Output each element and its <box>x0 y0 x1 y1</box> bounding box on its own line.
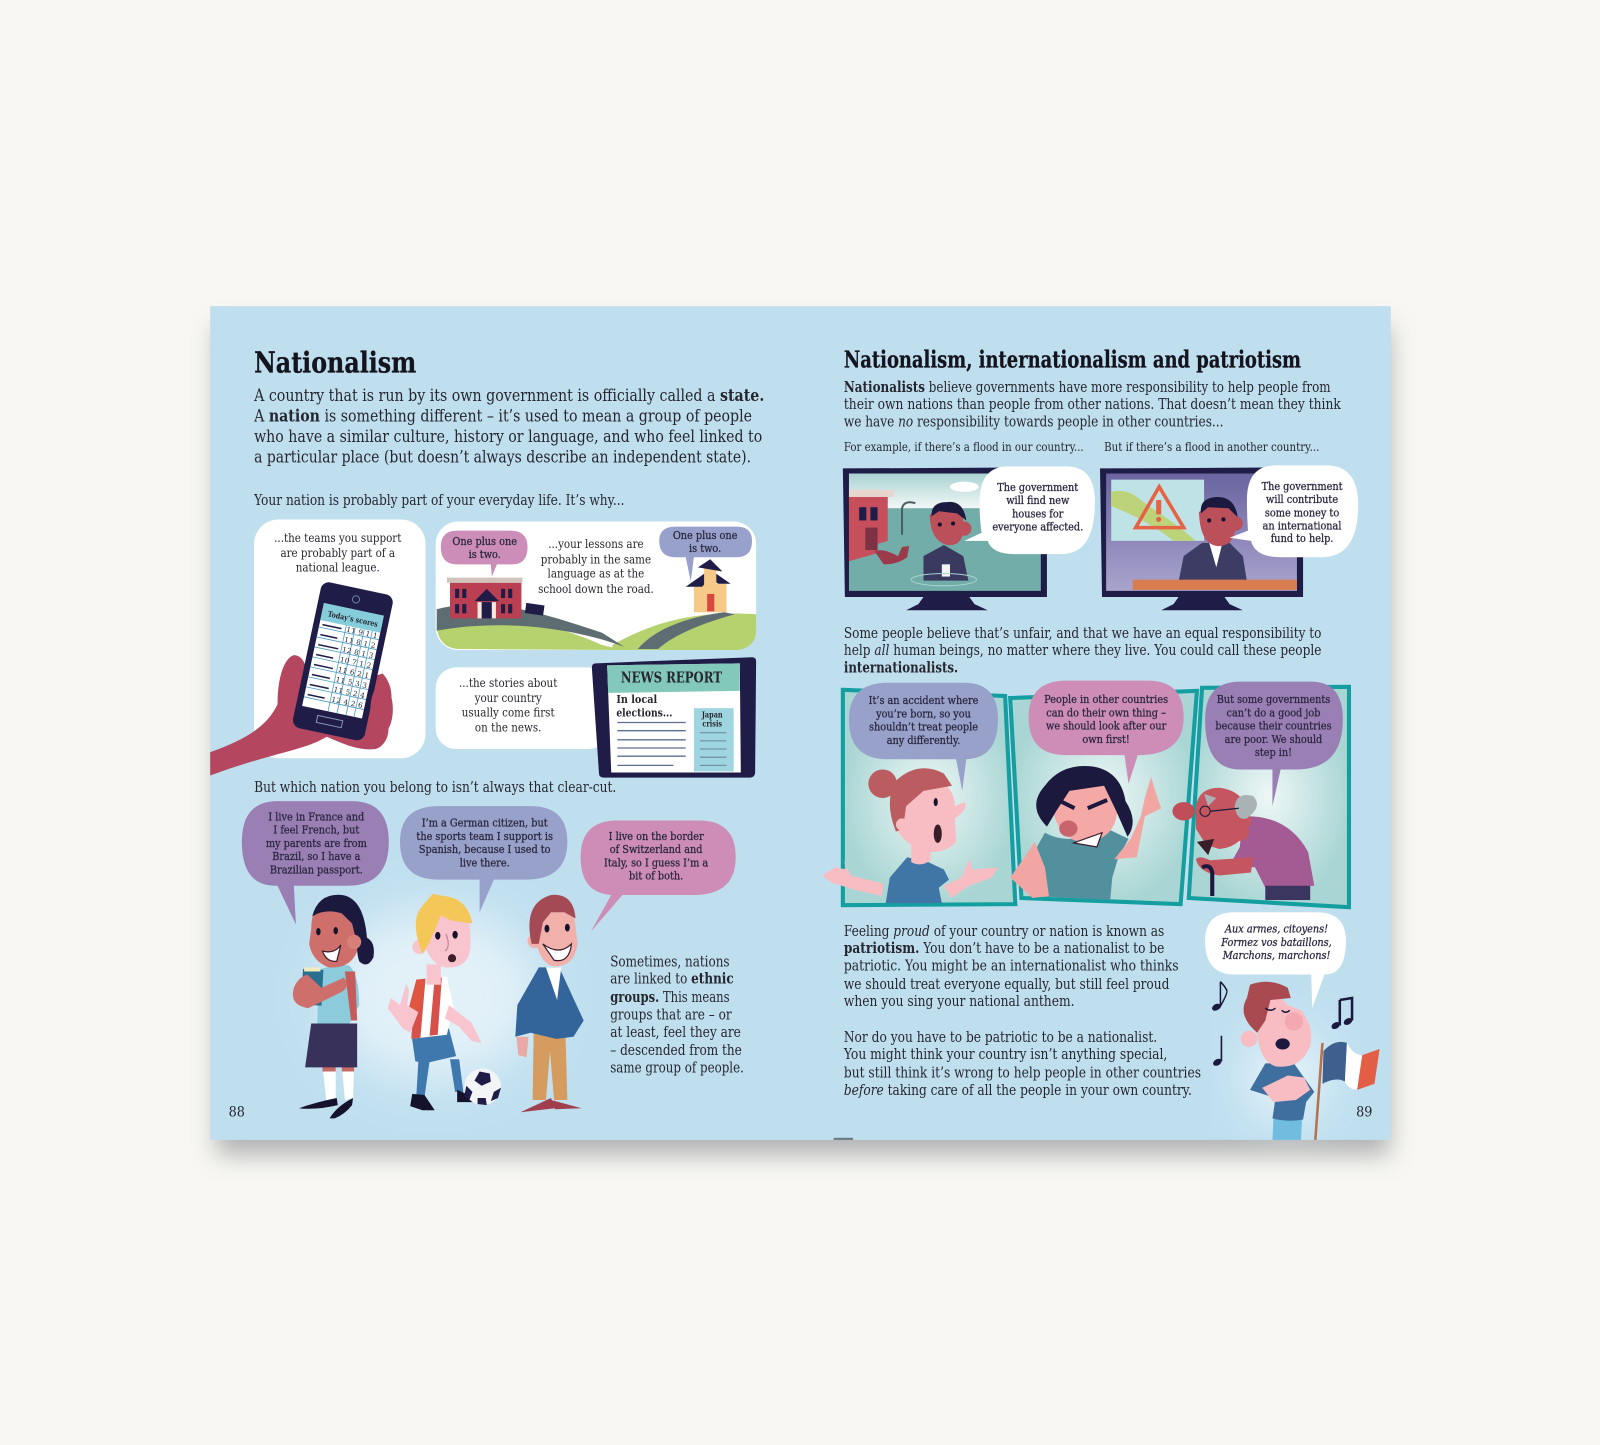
speech bubble: anthem lyrics: Marchons, marchons! <box>1222 950 1330 962</box>
panel: news stories <box>436 657 756 778</box>
text: ethnic groups: groups. This means <box>610 989 730 1006</box>
intro paragraph: A country that is run by its own government is officially called a state. <box>253 385 764 405</box>
internationalists paragraph: internationalists. <box>844 660 958 677</box>
icon: music note lower left <box>1212 1036 1223 1067</box>
speech bubble: look after our own: we should look after our <box>1046 720 1166 733</box>
speech bubble: international fund: an international <box>1263 520 1341 533</box>
text: ethnic groups: – descended from the <box>610 1042 742 1059</box>
duck <box>874 546 909 564</box>
speech bubble: governments poor: But some governments <box>1217 694 1330 706</box>
hills and road <box>437 604 756 650</box>
nationalist paragraph: You might think your country isn’t anything special, <box>843 1046 1167 1063</box>
speech bubble: governments poor: step in! <box>1255 747 1292 759</box>
page number 89: 89 <box>1356 1104 1372 1120</box>
speech bubble: German Spanish: I’m a German citizen, but <box>422 817 548 830</box>
icon: hand holding phone: 11 8 1 2 <box>343 635 376 650</box>
speech bubble: international fund: some money to <box>1265 507 1339 520</box>
speech bubble: French Brazilian: I live in France and <box>268 811 365 824</box>
icon: hand holding phone: Today’s scores <box>327 609 379 629</box>
speech bubble: look after our own: can do their own thing – <box>1046 707 1166 720</box>
speech bubble: pink one plus one: One plus one <box>452 535 517 548</box>
speech bubble: Swiss Italian border: of Switzerland and <box>610 844 703 856</box>
patriotism paragraph: Feeling proud of your country or nation is known as <box>844 923 1164 940</box>
internationalists paragraph <box>844 625 1322 676</box>
character: singing boy <box>1241 982 1380 1140</box>
glow behind characters <box>327 908 541 1082</box>
intro paragraph <box>253 385 764 466</box>
panel text: lessons: ...your lessons are <box>548 537 644 551</box>
TV: flood reporter <box>843 467 1047 610</box>
school building <box>447 578 544 618</box>
panel text: lessons: language as at the <box>548 567 644 581</box>
TV: news anchor <box>1100 467 1303 610</box>
patriotism paragraph: we should treat everyone equally, but still feel proud <box>844 976 1170 993</box>
speech bubble: find new houses: will find new <box>1006 495 1069 507</box>
speech bubble: governments poor: because their countries <box>1215 720 1332 733</box>
icon: hand holding phone: 11 6 2 1 <box>337 665 370 680</box>
icon: hand holding phone: 11 5 2 4 <box>333 685 366 700</box>
speech bubble: Swiss Italian border: bit of both. <box>629 870 683 883</box>
speech bubble: accident of birth: you’re born, so you <box>875 708 971 721</box>
right page title: Nationalism, internationalism and patriotism <box>844 345 1301 373</box>
patriotism paragraph: when you sing your national anthem. <box>844 993 1074 1010</box>
speech bubble: French Brazilian: Brazil, so I have a <box>272 851 360 863</box>
icon: tablet news report: Japan <box>701 710 723 720</box>
caption: flood in another country: But if there’s a flood in another country... <box>1104 440 1319 454</box>
nationalists paragraph: their own nations than people from other nations. That doesn’t mean they think <box>844 396 1342 413</box>
panel text: stories: ...the stories about <box>459 676 558 690</box>
speech bubble: anthem lyrics <box>1205 912 1346 1008</box>
left page title: Nationalism <box>254 346 417 380</box>
icon: tablet news report: NEWS REPORT <box>621 669 722 687</box>
nationalist paragraph: but still think it’s wrong to help people in other countries <box>844 1065 1201 1082</box>
panel: school lessons <box>436 521 756 650</box>
text: ethnic groups <box>610 953 744 1076</box>
speech bubble: look after our own <box>1029 681 1184 784</box>
character: shrugging woman <box>822 768 998 903</box>
page number 88: 88 <box>229 1104 245 1120</box>
speech bubble: German Spanish <box>400 806 567 912</box>
speech bubble: pink one plus one <box>441 531 528 577</box>
panel text: teams: ...the teams you support <box>274 531 402 545</box>
nationalists paragraph: Nationalists believe governments have more responsibility to help people from <box>844 379 1331 396</box>
flag <box>1315 1042 1380 1140</box>
speech bubble: find new houses: The government <box>997 481 1079 494</box>
icon: tablet news report <box>592 657 756 778</box>
comic panel: angry woman <box>1010 681 1197 904</box>
nationalist paragraph: before taking care of all the people in your own country. <box>844 1082 1192 1099</box>
panel text: lessons: school down the road. <box>538 582 654 596</box>
text: ethnic groups: Sometimes, nations <box>610 953 730 970</box>
panel text: lessons: probably in the same <box>541 553 651 567</box>
comic panel: woman shrugging <box>822 683 1015 905</box>
speech bubble: Swiss Italian border: I live on the border <box>609 830 704 843</box>
speech bubble: look after our own: own first! <box>1082 733 1130 746</box>
glow behind singer <box>1245 1031 1327 1122</box>
speech bubble: pink one plus one: is two. <box>469 549 501 561</box>
speech bubble: international fund: fund to help. <box>1271 532 1333 545</box>
text: ethnic groups: same group of people. <box>610 1060 744 1077</box>
character: old man with cane <box>1172 788 1314 900</box>
patriotism paragraph: patriotic. You might be an internationalist who thinks <box>844 957 1179 974</box>
comic panel: old man <box>1172 682 1349 907</box>
character: girl with passport <box>293 895 374 1118</box>
internationalists paragraph: Some people believe that’s unfair, and that we have an equal responsibility to <box>844 625 1322 642</box>
speech bubble: governments poor: are poor. We should <box>1225 733 1323 746</box>
speech bubble: international fund: The government <box>1262 480 1343 493</box>
panel text: teams: are probably part of a <box>280 547 395 560</box>
reporter <box>911 502 977 586</box>
icon: hand holding phone: 12 8 1 3 <box>341 645 374 660</box>
patriotism paragraph: patriotism. You don’t have to be a nationalist to be <box>844 940 1164 957</box>
nationalists paragraph: we have no responsibility towards people in other countries... <box>844 414 1223 431</box>
text: ethnic groups: at least, feel they are <box>610 1024 741 1041</box>
speech bubble: French Brazilian: my parents are from <box>266 838 367 850</box>
internationalists paragraph: help all human beings, no matter where they live. You could call these people <box>844 642 1322 659</box>
icon: tablet news report: crisis <box>702 719 722 729</box>
icon: hand holding phone: 12 4 2 6 <box>331 695 364 710</box>
icon: hand holding phone: 10 7 1 2 <box>339 655 372 670</box>
speech bubble: Swiss Italian border: Italy, so I guess I’m a <box>604 857 708 870</box>
icon: hand holding phone <box>210 581 394 776</box>
text: ethnic groups: are linked to ethnic <box>610 971 734 988</box>
patriotism paragraph <box>844 923 1179 1010</box>
icon: tablet news report: In local <box>616 692 657 706</box>
panel text: stories: your country <box>474 691 542 705</box>
icon: music note upper left <box>1211 982 1227 1012</box>
panel text: teams: national league. <box>296 561 380 575</box>
anchor <box>1133 497 1297 590</box>
map with warning triangle <box>1111 480 1204 541</box>
football <box>464 1068 501 1105</box>
speech bubble: lavender one plus one: One plus one <box>673 529 737 542</box>
icon: double music note <box>1330 998 1353 1031</box>
speech bubble: French Brazilian: Brazilian passport. <box>270 864 363 877</box>
speech bubble: German Spanish: live there. <box>460 857 510 870</box>
speech bubble: find new houses: everyone affected. <box>992 521 1083 534</box>
character: angry woman <box>1010 766 1161 900</box>
flooded building <box>849 490 915 561</box>
speech bubble: Swiss Italian border <box>581 820 736 932</box>
house on hill <box>686 559 731 612</box>
character: boy with football <box>388 894 501 1110</box>
nationalists paragraph <box>844 379 1342 431</box>
text: ethnic groups: groups that are – or <box>610 1006 732 1023</box>
icon: hand holding phone: 11 9 1 1 <box>346 625 378 640</box>
speech bubble: accident of birth: shouldn’t treat people <box>869 721 978 734</box>
speech bubble: lavender one plus one: is two. <box>689 543 721 555</box>
clear-cut lead-in: But which nation you belong to isn’t always that clear-cut. <box>254 779 616 796</box>
speech bubble: accident of birth <box>849 683 998 791</box>
icon: tablet news report: elections... <box>616 705 672 719</box>
speech bubble: German Spanish: the sports team I support is <box>416 830 553 843</box>
book spread background <box>210 306 1391 1140</box>
nationalist paragraph <box>843 1029 1201 1099</box>
speech bubble: French Brazilian: I feel French, but <box>273 824 360 837</box>
icon: hand holding phone: 11 5 3 3 <box>335 675 368 690</box>
panel text: stories: on the news. <box>475 721 541 735</box>
speech bubble: accident of birth: It’s an accident where <box>869 695 978 707</box>
speech bubble: governments poor: can’t do a good job <box>1227 707 1321 720</box>
intro paragraph: A nation is something different – it’s used to mean a group of people <box>253 405 752 425</box>
speech bubble: look after our own: People in other countries <box>1044 694 1168 706</box>
everyday life lead-in: Your nation is probably part of your everyday life. It’s why... <box>253 492 624 509</box>
speech bubble: accident of birth: any differently. <box>887 734 960 747</box>
speech bubble: French Brazilian <box>242 801 389 925</box>
intro paragraph: a particular place (but doesn’t always describe an independent state). <box>254 446 751 466</box>
caption: flood in our country: For example, if there’s a flood in our country... <box>844 440 1084 454</box>
speech bubble: governments poor <box>1205 682 1343 806</box>
speech bubble: international fund <box>1230 465 1358 557</box>
nationalist paragraph: Nor do you have to be patriotic to be a nationalist. <box>844 1029 1157 1046</box>
speech bubble: anthem lyrics: Aux armes, citoyens! <box>1224 923 1328 936</box>
panel: teams and league <box>210 519 426 776</box>
character: man in blazer <box>515 895 584 1112</box>
panel text: stories: usually come first <box>462 706 555 720</box>
intro paragraph: who have a similar culture, history or language, and who feel linked to <box>254 426 762 446</box>
speech bubble: find new houses: houses for <box>1012 508 1063 521</box>
speech bubble: international fund: will contribute <box>1266 494 1338 506</box>
speech bubble: lavender one plus one <box>659 527 752 582</box>
speech bubble: German Spanish: Spanish, because I used to <box>419 844 551 856</box>
speech bubble: find new houses <box>964 466 1095 554</box>
speech bubble: anthem lyrics: Formez vos bataillons, <box>1220 937 1332 949</box>
